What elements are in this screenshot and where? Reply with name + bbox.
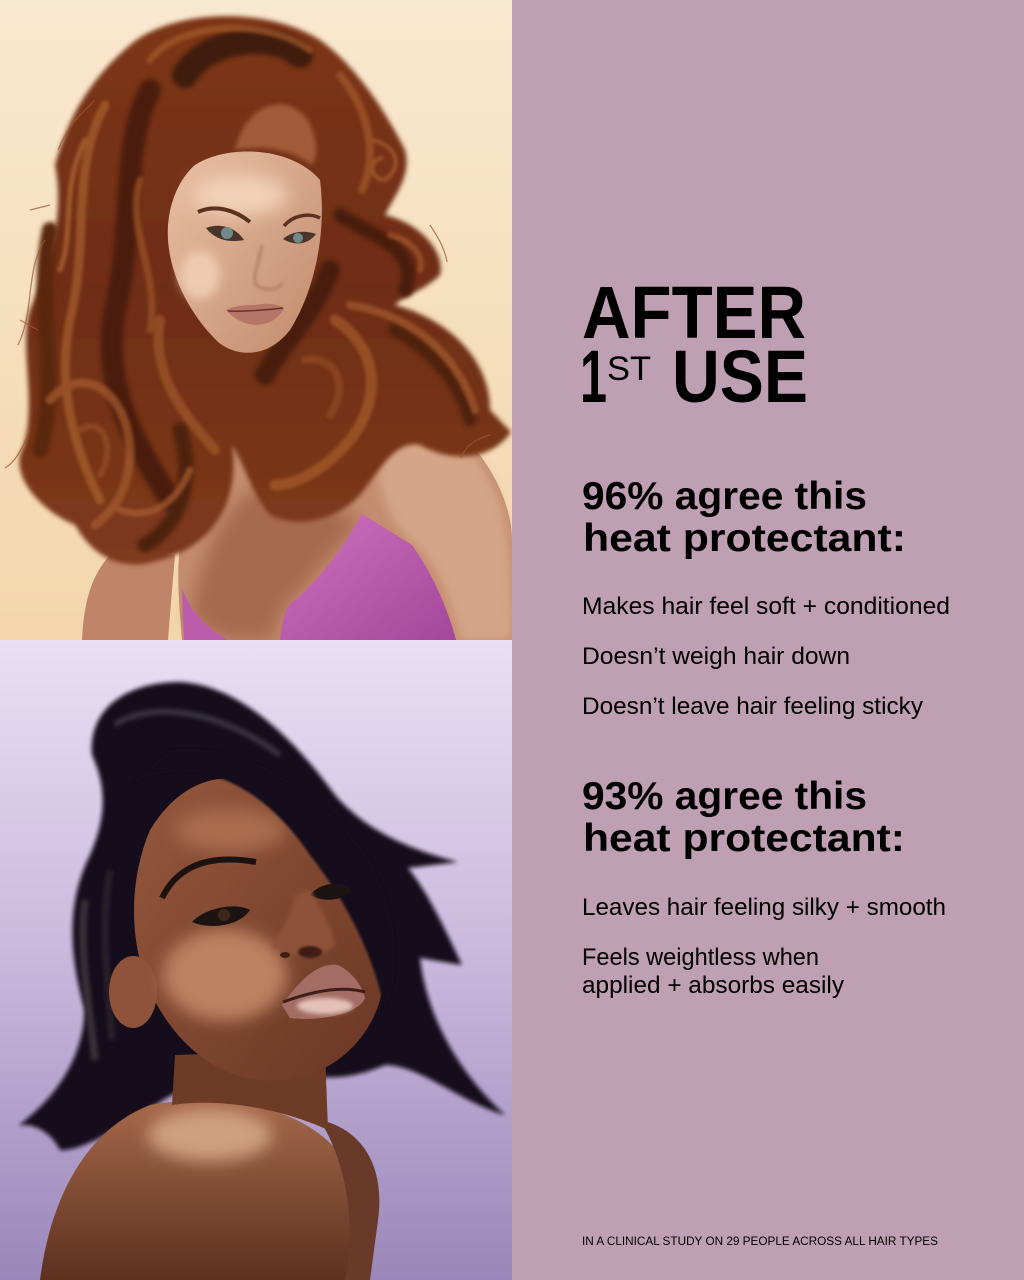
list: 96% claims: Doesn’t leave hair feeling sticky	[582, 693, 923, 720]
face	[134, 778, 384, 1081]
heading: after 1st use: USE	[672, 335, 808, 418]
fringe	[130, 749, 396, 1010]
subheading: 96%: heat protectant:	[583, 517, 906, 560]
left arm	[82, 555, 175, 640]
heading: after 1st use: 1	[580, 335, 607, 418]
subheading: 96%: 96% agree this	[582, 475, 867, 518]
subheading: 93%: heat protectant:	[583, 817, 905, 860]
hair mass	[19, 16, 511, 565]
list: 93% claims: applied + absorbs easily	[582, 972, 844, 999]
photo: woman with auburn curls	[0, 0, 512, 640]
list: 96% claims: Doesn’t weigh hair down	[582, 643, 850, 670]
heading: after 1st use: AFTER	[582, 271, 806, 354]
photo: woman with black bob	[0, 640, 512, 1280]
subheading: 96%	[582, 475, 906, 560]
text column	[580, 271, 950, 1248]
eyes, nose, lips	[198, 208, 320, 325]
shoulder	[40, 1100, 355, 1280]
heading: after 1st use	[580, 271, 808, 418]
wispy flyaways	[5, 100, 490, 468]
face	[168, 151, 322, 353]
list: 96% claims	[582, 593, 950, 720]
list: 93% claims: Leaves hair feeling silky + smooth	[582, 894, 946, 921]
list: 93% claims: Feels weightless when	[582, 944, 819, 971]
list: 96% claims: Makes hair feel soft + conditioned	[582, 593, 950, 620]
heading: after 1st use: ST	[607, 350, 651, 388]
hair back	[18, 682, 505, 1150]
subheading: 93%: 93% agree this	[582, 775, 867, 818]
torso and shoulder	[178, 368, 512, 640]
footnote: IN A CLINICAL STUDY ON 29 PEOPLE ACROSS ALL HAIR TYPES	[582, 1236, 938, 1248]
ear	[109, 956, 157, 1028]
curl highlights	[50, 28, 475, 525]
garment	[280, 514, 456, 640]
dark roots and rolls	[40, 41, 470, 545]
list: 93% claims	[582, 894, 946, 999]
neck	[172, 1050, 328, 1130]
hair part	[235, 104, 316, 165]
subheading: 93%	[582, 775, 905, 860]
eyes, nose, lips	[162, 860, 365, 1019]
hair shine	[83, 712, 280, 1060]
